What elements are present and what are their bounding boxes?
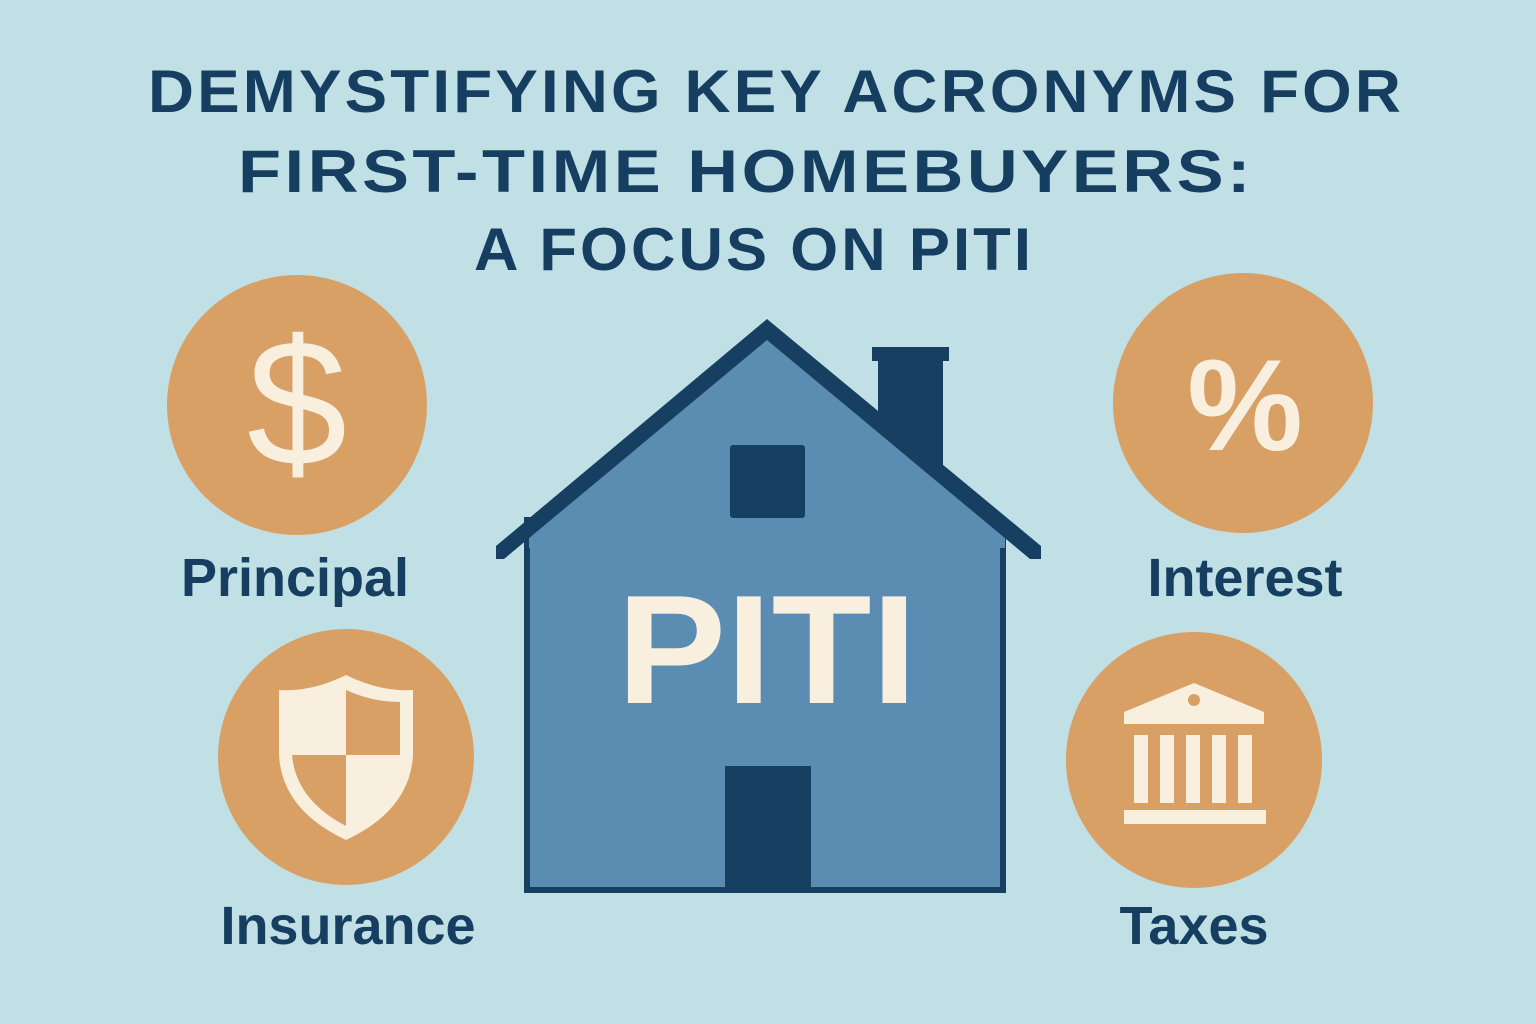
icon: dollar (Principal): $ [247, 303, 347, 504]
icon: shield (Insurance) [218, 629, 474, 885]
title [148, 58, 1404, 283]
icon: bank (Taxes) [1066, 632, 1322, 888]
label: Insurance: Insurance [220, 896, 476, 956]
house: PITI [496, 319, 1041, 890]
icon: percent (Interest) [1113, 273, 1373, 533]
title: A FOCUS ON PITI [474, 216, 1034, 283]
house: PITI: PITI [617, 563, 917, 736]
title: FIRST-TIME HOMEBUYERS: [238, 138, 1254, 205]
label: Interest: Interest [1147, 548, 1343, 608]
label: Principal: Principal [181, 548, 409, 608]
icon: dollar (Principal) [167, 275, 427, 535]
title: DEMYSTIFYING KEY ACRONYMS FOR [148, 58, 1404, 125]
label: Taxes: Taxes [1119, 896, 1269, 956]
icon: percent (Interest): % [1187, 332, 1303, 478]
